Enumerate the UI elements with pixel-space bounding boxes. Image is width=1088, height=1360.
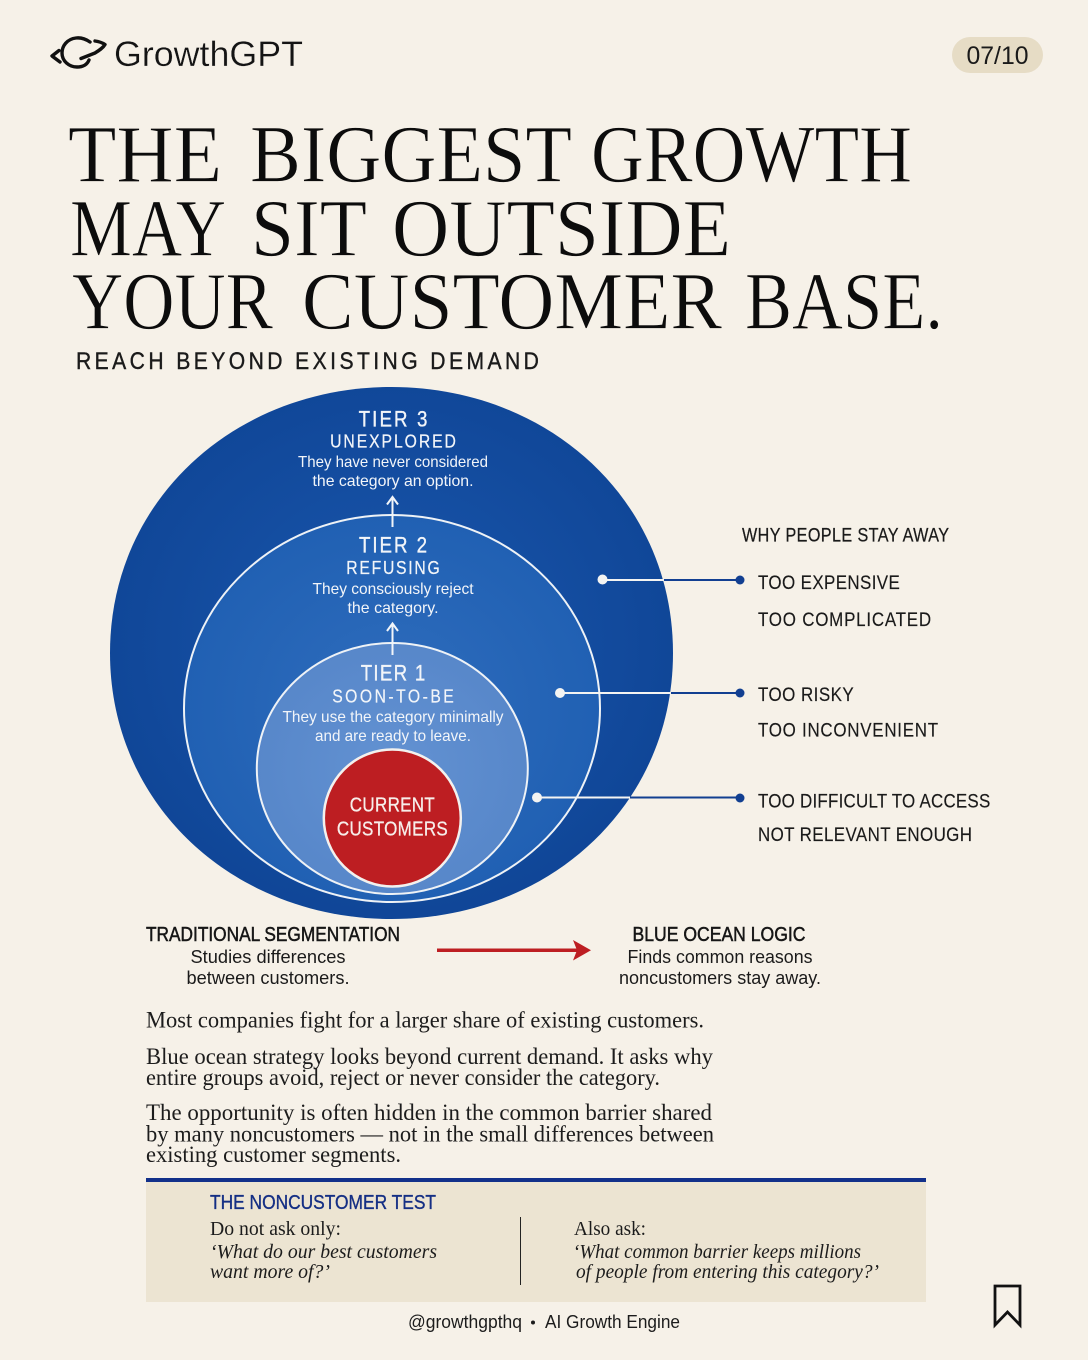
barriers: tier 1: TOO DIFFICULT TO ACCESS <box>758 789 990 812</box>
column: also ask: ‘What common barrier keeps millions <box>573 1241 861 1263</box>
subtitle: REACH BEYOND EXISTING DEMAND <box>76 348 539 374</box>
label: tier 2 <box>312 534 474 617</box>
title: GROWTH <box>591 108 912 200</box>
footer: @growthgpthq <box>408 1312 522 1332</box>
label: tier 2: TIER 2 <box>359 534 427 558</box>
comparison: traditional segmentation: TRADITIONAL SEGMENTATION <box>146 924 400 946</box>
title: CUSTOMER <box>302 256 722 346</box>
comparison: blue ocean logic: Finds common reasons <box>628 947 812 967</box>
heading: why people stay away: WHY PEOPLE STAY AWAY <box>742 524 949 546</box>
arrow: tier 2 to tier 3 <box>387 497 398 527</box>
arrow: traditional to blue ocean <box>437 940 591 960</box>
concentric tier diagram <box>110 387 673 919</box>
circle: current customers: CUSTOMERS <box>337 817 448 840</box>
column: also ask: of people from entering this category?’ <box>576 1261 879 1283</box>
connector: tier 2 <box>555 688 744 698</box>
page badge <box>952 37 1043 73</box>
circle: tier 1 <box>257 643 528 894</box>
footer: AI Growth Engine <box>545 1312 680 1332</box>
barriers: tier 3 <box>758 571 931 630</box>
comparison: traditional segmentation <box>146 924 400 988</box>
title: OUTSIDE <box>392 182 731 274</box>
page badge: 07/10 <box>966 42 1028 70</box>
circle: current customers <box>324 750 461 886</box>
comparison: traditional segmentation: between customers. <box>186 968 350 988</box>
barriers: tier 3: TOO COMPLICATED <box>758 608 931 630</box>
barriers: tier 2: TOO INCONVENIENT <box>758 718 938 741</box>
panel: the noncustomer test <box>146 1178 926 1302</box>
logo: GrowthGPT: GrowthGPT <box>114 35 303 74</box>
label: tier 1 <box>282 662 504 745</box>
label: tier 3: the category an option. <box>312 473 474 490</box>
body copy: The opportunity is often hidden in the common barrier shared <box>146 1100 712 1125</box>
comparison: traditional segmentation: Studies differences <box>190 947 346 967</box>
column: do not ask only: want more of?’ <box>210 1261 330 1283</box>
body copy: Most companies fight for a larger share of existing customers. <box>146 1008 704 1032</box>
title: BASE. <box>745 256 943 346</box>
body copy <box>146 1008 714 1167</box>
title: SIT <box>251 182 367 274</box>
label: tier 1: TIER 1 <box>361 662 425 686</box>
title: YOUR <box>72 256 273 346</box>
label: tier 1: They use the category minimally <box>282 709 504 726</box>
label: tier 3 <box>298 408 488 490</box>
label: tier 1: and are ready to leave. <box>315 728 471 745</box>
connector: tier 1 <box>532 792 744 802</box>
comparison: blue ocean logic: BLUE OCEAN LOGIC <box>632 924 806 946</box>
circle: tier 2 <box>184 515 600 902</box>
label: tier 2: REFUSING <box>346 557 440 578</box>
column: do not ask only: ‘What do our best customers <box>210 1241 437 1263</box>
label: tier 1: SOON-TO-BE <box>332 685 454 707</box>
column: also ask: Also ask: <box>574 1218 646 1240</box>
body copy: by many noncustomers — not in the small differences between <box>146 1122 714 1146</box>
column: do not ask only: Do not ask only: <box>210 1218 341 1240</box>
footer <box>408 1312 680 1332</box>
label: tier 2: They consciously reject <box>312 581 474 598</box>
body copy: existing customer segments. <box>146 1142 401 1167</box>
body copy: Blue ocean strategy looks beyond current demand. It asks why <box>146 1044 713 1069</box>
body copy: entire groups avoid, reject or never consider the category. <box>146 1065 660 1090</box>
title: MAY <box>70 182 226 274</box>
barriers: tier 1: NOT RELEVANT ENOUGH <box>758 823 972 845</box>
circle: current customers: CURRENT <box>350 793 435 816</box>
column: do not ask only <box>210 1218 437 1283</box>
label: tier 2: the category. <box>348 600 438 617</box>
title: THE <box>68 108 222 200</box>
icon: GrowthGPT orbit mark <box>52 38 105 67</box>
column: also ask <box>573 1218 879 1283</box>
barriers: tier 3: TOO EXPENSIVE <box>758 571 900 593</box>
comparison: blue ocean logic <box>619 924 821 988</box>
circle: tier 3 <box>110 387 673 919</box>
connector: tier 3 <box>598 574 744 584</box>
arrow: tier 1 to tier 2 <box>387 624 398 655</box>
barriers: tier 1 <box>758 789 990 845</box>
barrier callouts <box>532 524 990 845</box>
title <box>68 108 943 346</box>
label: tier 3: UNEXPLORED <box>330 430 456 452</box>
label: tier 3: They have never considered <box>298 454 488 471</box>
comparison: blue ocean logic: noncustomers stay away. <box>619 968 821 988</box>
title: BIGGEST <box>250 108 572 200</box>
barriers: tier 2: TOO RISKY <box>758 683 854 705</box>
icon: bookmark <box>995 1286 1020 1325</box>
label: tier 3: TIER 3 <box>359 408 427 432</box>
barriers: tier 2 <box>758 683 938 741</box>
heading: the noncustomer test: THE NONCUSTOMER TEST <box>210 1192 436 1214</box>
